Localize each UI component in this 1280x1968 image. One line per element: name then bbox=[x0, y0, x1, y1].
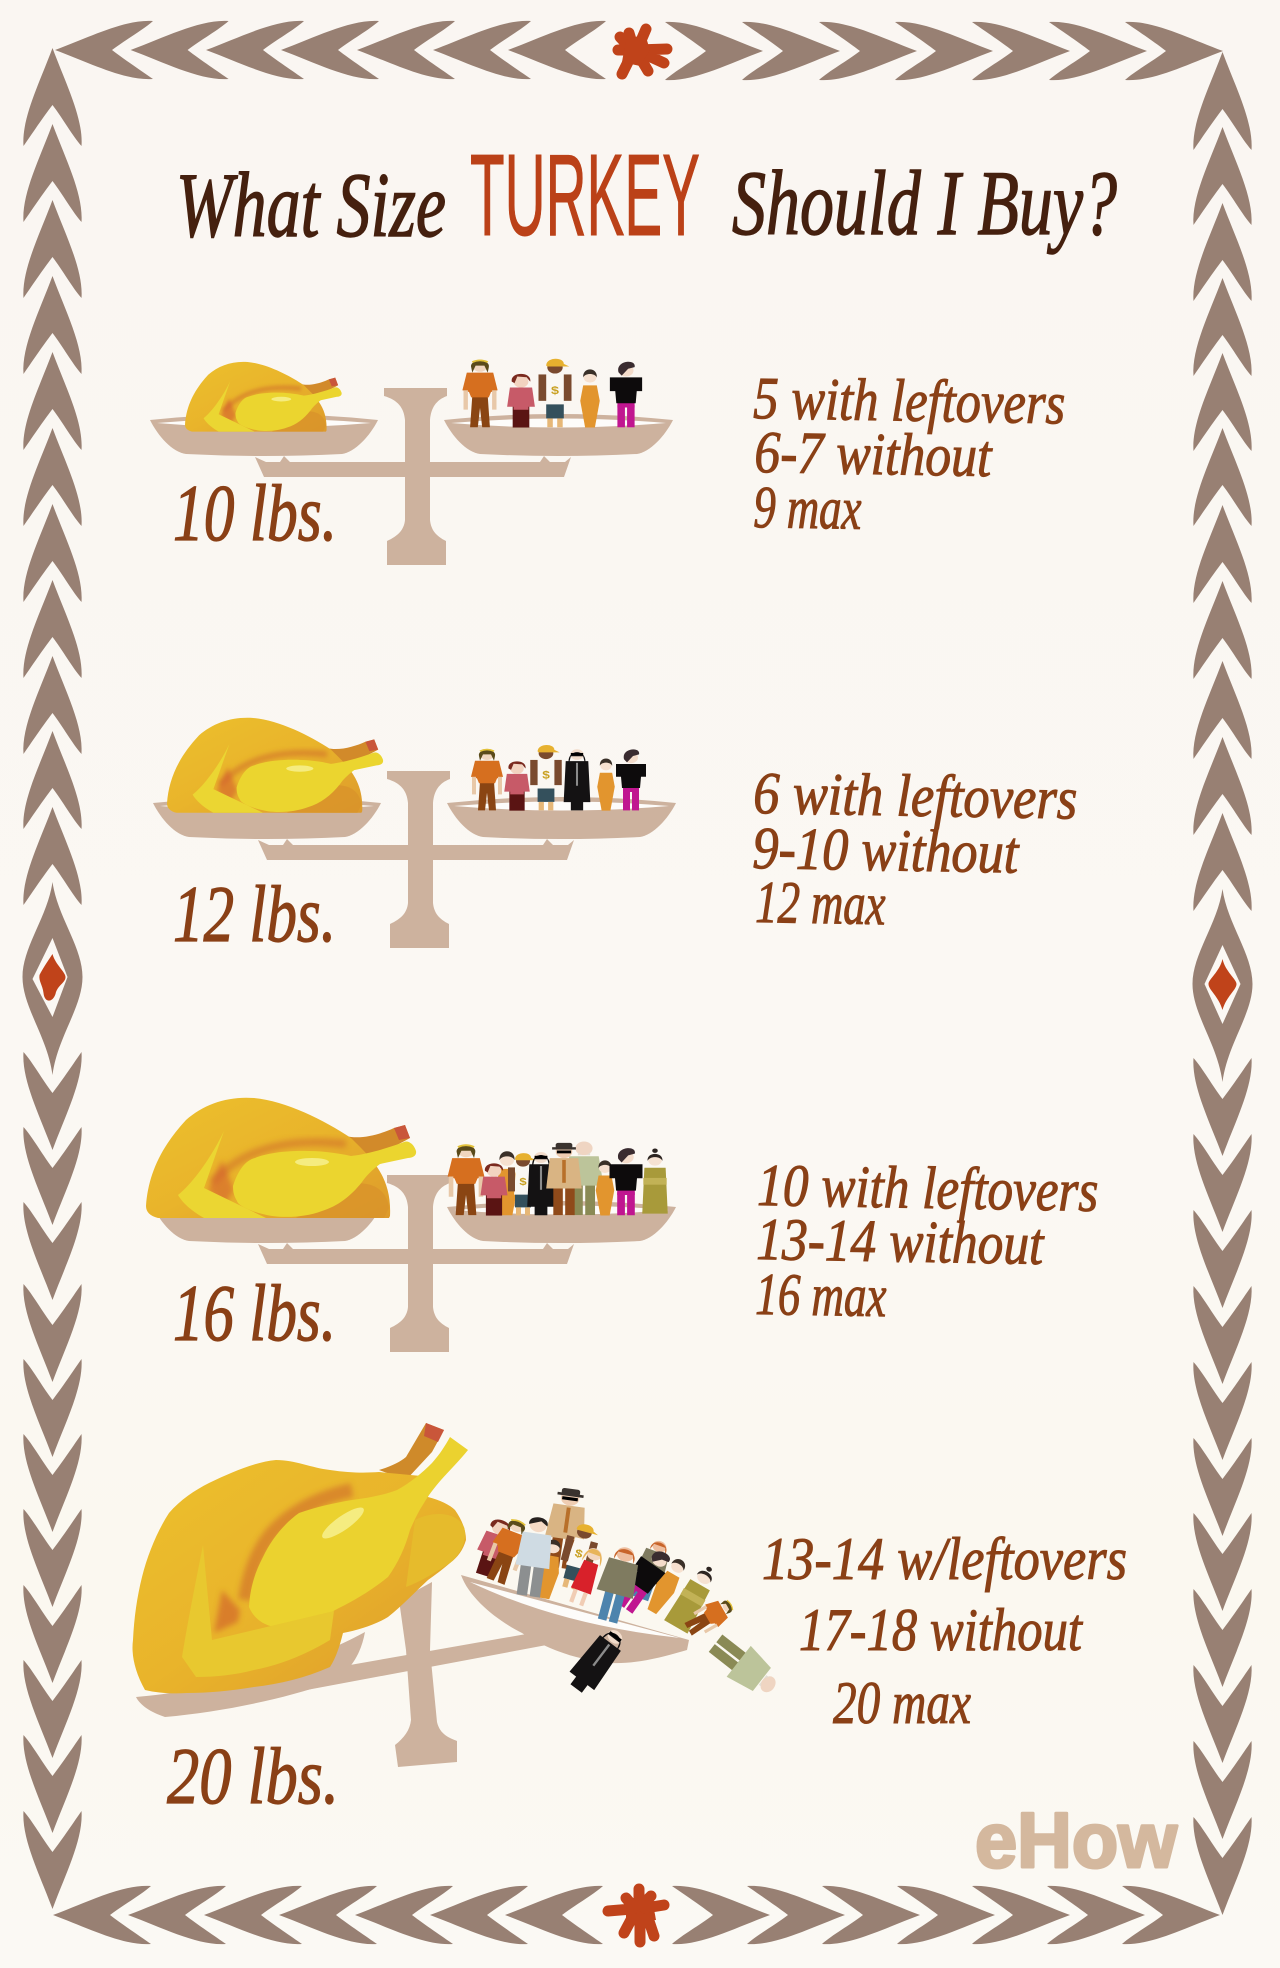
border: left upper chevrons bbox=[23, 48, 82, 905]
turkey bbox=[146, 1098, 416, 1218]
servings text: 16 max bbox=[755, 1261, 887, 1329]
icon: left diamond ornament bbox=[22, 882, 82, 1075]
scale bbox=[153, 771, 676, 948]
icon: right diamond ornament bbox=[1192, 889, 1252, 1082]
people group bbox=[462, 359, 642, 428]
panel: 20 lbs row bbox=[132, 1423, 1127, 1821]
weight label: 12 lbs. bbox=[173, 871, 336, 959]
servings text: 6 with leftovers bbox=[753, 760, 1078, 832]
icon: bottom flower bbox=[608, 1889, 664, 1942]
turkey bbox=[132, 1423, 468, 1693]
servings text: 9 max bbox=[753, 474, 862, 542]
servings text: 17-18 without bbox=[799, 1597, 1083, 1663]
servings text: 9-10 without bbox=[752, 815, 1020, 886]
servings text: 12 max bbox=[755, 869, 886, 937]
title bbox=[176, 130, 1117, 260]
servings text: 13-14 w/leftovers bbox=[762, 1526, 1127, 1592]
scale bbox=[153, 1175, 676, 1352]
servings text: 13-14 without bbox=[756, 1206, 1045, 1277]
title: TURKEY bbox=[470, 130, 700, 260]
turkey bbox=[185, 362, 342, 432]
people group bbox=[448, 1142, 668, 1216]
border: top chevrons bbox=[55, 21, 1223, 80]
servings text bbox=[751, 365, 1066, 545]
people group bbox=[470, 1486, 786, 1704]
turkey bbox=[167, 718, 383, 813]
border: left lower chevrons bbox=[23, 1052, 82, 1909]
scale bbox=[150, 388, 673, 565]
people group bbox=[471, 745, 646, 811]
weight label: 16 lbs. bbox=[173, 1270, 336, 1358]
servings text: 20 max bbox=[833, 1670, 971, 1736]
weight label: 10 lbs. bbox=[173, 470, 337, 558]
icon: top flower bbox=[618, 29, 667, 74]
servings text bbox=[755, 1152, 1099, 1333]
weight label: 20 lbs. bbox=[167, 1733, 339, 1821]
servings text bbox=[751, 760, 1078, 941]
border: right upper chevrons bbox=[1193, 52, 1252, 911]
servings text: 5 with leftovers bbox=[753, 365, 1066, 436]
panel: 10 lbs row bbox=[150, 359, 1066, 565]
servings text: 6-7 without bbox=[754, 419, 993, 489]
tilted scale bbox=[136, 1575, 689, 1767]
eHow logo: eHow bbox=[975, 1796, 1177, 1884]
border: bottom chevrons bbox=[53, 1886, 1220, 1944]
border: right lower chevrons bbox=[1193, 1058, 1252, 1915]
servings text: 10 with leftovers bbox=[757, 1152, 1099, 1224]
panel: 16 lbs row bbox=[146, 1098, 1099, 1358]
servings text bbox=[762, 1526, 1127, 1736]
title: Should I Buy? bbox=[732, 152, 1117, 254]
panel: 12 lbs row bbox=[153, 718, 1078, 959]
title: What Size bbox=[176, 154, 446, 256]
